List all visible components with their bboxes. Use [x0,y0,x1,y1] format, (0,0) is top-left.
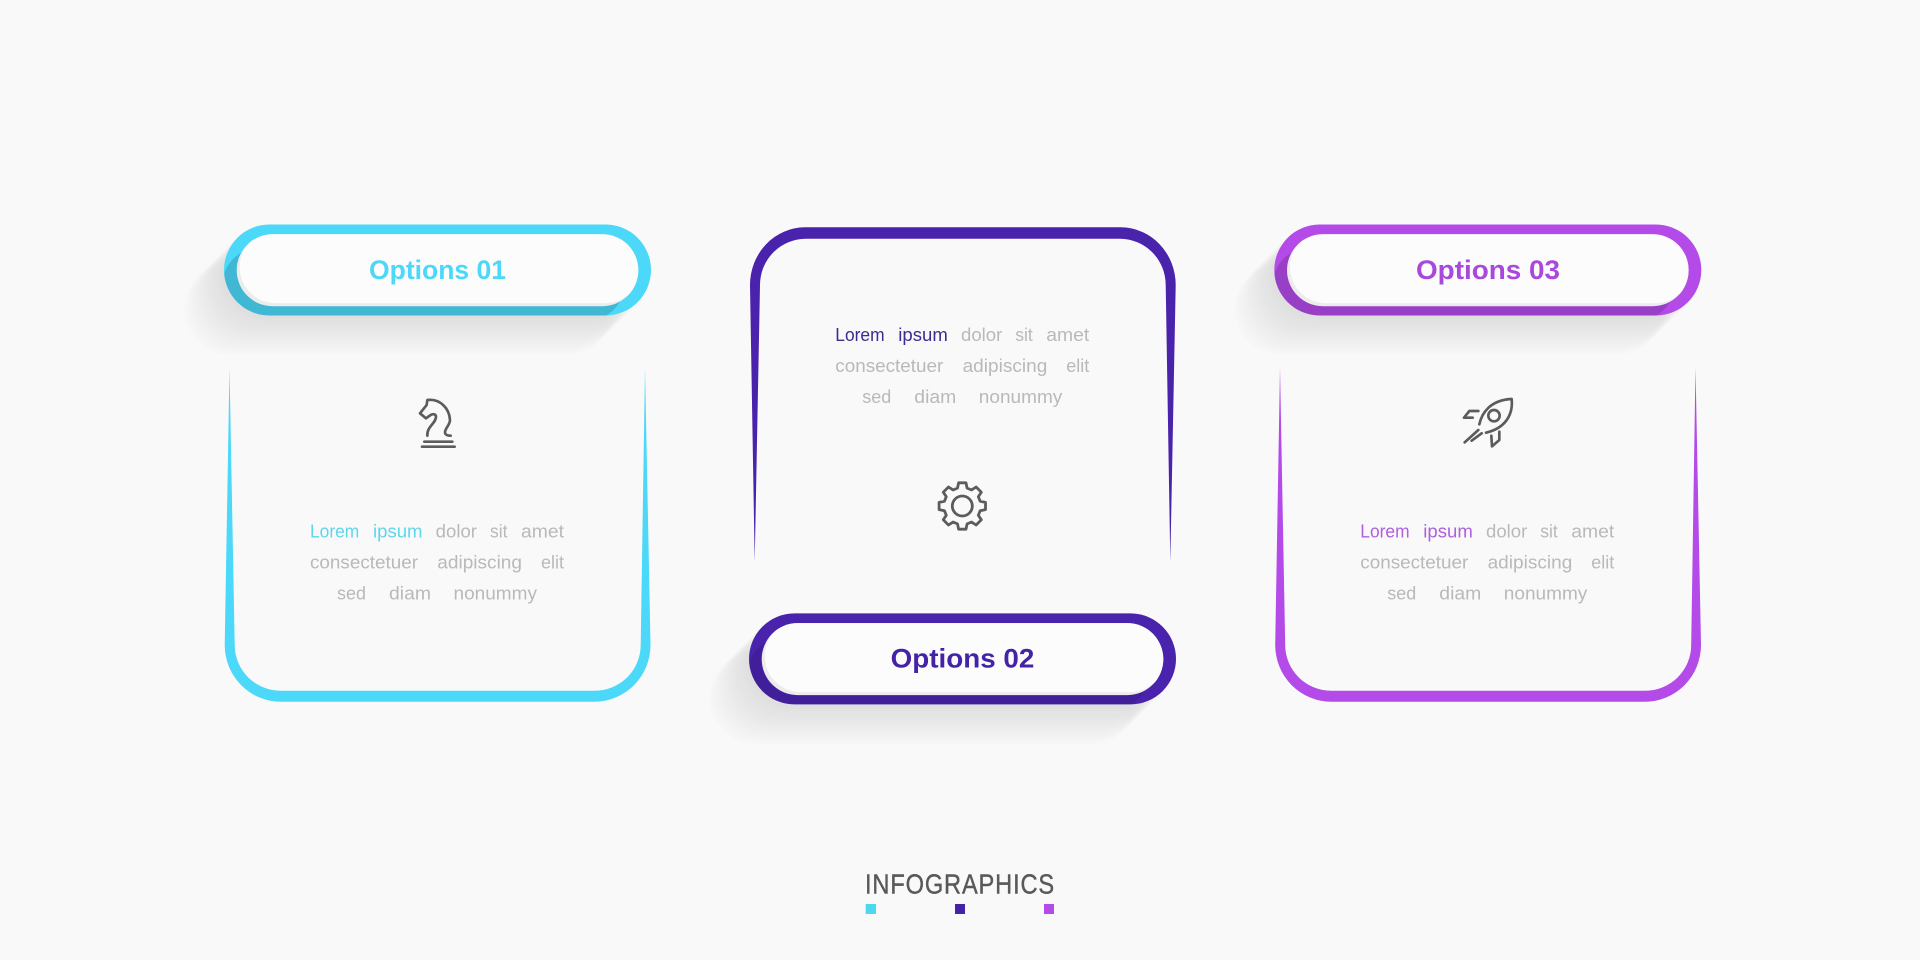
text block: elit [541,551,564,572]
text block: sed [1387,582,1416,603]
pill shadow [710,616,1173,743]
pill shadow [185,228,648,354]
pill ring [224,224,651,316]
pill inner highlight [240,231,641,303]
ring inner shade [749,642,1144,704]
card outline [225,368,650,702]
pill ring [749,613,1176,704]
pill ring [1274,224,1701,316]
pill inner face [762,623,1163,695]
pill shadow [1235,228,1698,354]
heading: options 02: Options 02 [891,644,1034,674]
colour squares legend [866,904,1054,914]
heading: options 03: Options 03 [1416,255,1560,285]
text block: dolor [961,324,1002,345]
card outline [750,227,1176,562]
pill inner highlight [765,620,1166,692]
text block [835,324,1089,407]
heading: options 01: Options 01 [369,255,506,285]
text block: sit [490,520,508,541]
text block: dolor [436,520,477,541]
text block: sed [862,386,891,407]
text block: sit [1540,520,1558,541]
footer title: INFOGRAPHICS [865,868,1055,899]
text block: ipsum [898,324,948,345]
card outline [1275,368,1701,702]
text block: dolor [1486,520,1527,541]
footer: infographics logo [865,868,1055,914]
text block: amet [1046,324,1089,345]
text block: nonummy [454,582,538,603]
text block: adipiscing [963,355,1047,376]
text block [1360,520,1614,603]
icon: gear [939,483,986,529]
text block: consectetuer [1360,551,1468,572]
text block [310,520,564,603]
text block: nonummy [979,386,1063,407]
text block: nonummy [1504,582,1588,603]
text block: consectetuer [835,355,943,376]
text block: diam [914,386,956,407]
panel: option 01 [185,224,651,702]
text block: Lorem [1360,520,1410,541]
icon: chess knight [420,400,455,447]
text block: sed [337,582,366,603]
text block: diam [389,582,431,603]
ring inner shade [1274,253,1670,316]
text block: elit [1066,355,1089,376]
pill inner highlight [1290,231,1692,303]
icon: rocket [1464,399,1512,446]
pill: option 03 label [1235,224,1701,354]
ring inner shade [224,253,620,316]
pill inner face [1287,234,1689,306]
panel: option 03 [1235,224,1701,702]
text block: ipsum [373,520,422,541]
pill: option 02 label [710,613,1176,743]
pill inner face [237,234,638,306]
text block: elit [1591,551,1614,572]
text block: sit [1015,324,1033,345]
text block: ipsum [1423,520,1473,541]
pill: option 01 label [185,224,651,354]
text block: Lorem [310,520,359,541]
panel: option 02 [710,227,1176,743]
text block: Lorem [835,324,885,345]
text block: adipiscing [1488,551,1572,572]
text block: consectetuer [310,551,418,572]
text block: amet [521,520,564,541]
text block: adipiscing [437,551,522,572]
text block: amet [1571,520,1614,541]
text block: diam [1439,582,1481,603]
